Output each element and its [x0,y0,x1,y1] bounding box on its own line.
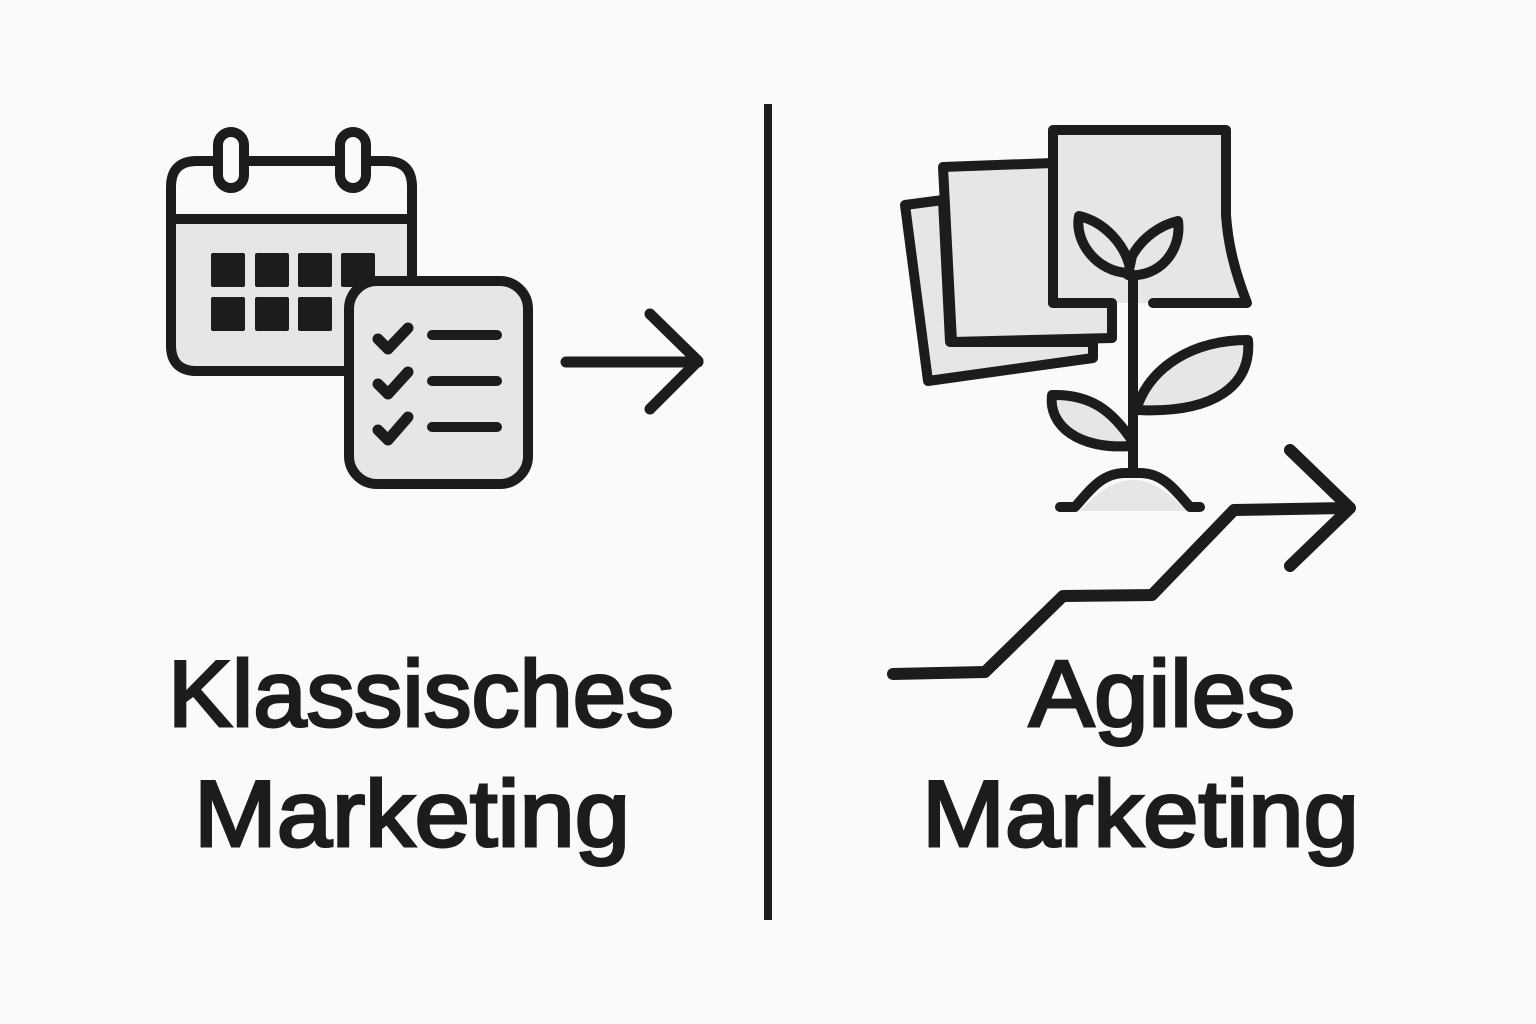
icon: checklist [349,281,528,484]
icon: calendar [171,132,412,371]
divider line [764,104,772,920]
icon: plant [1052,216,1248,511]
arrow: classic [566,314,698,409]
arrow: agile growth [893,450,1350,674]
heading: classic marketing: Klassisches [168,641,674,746]
heading: classic marketing [168,641,674,866]
heading: agile marketing: Marketing [922,761,1359,866]
heading: agile marketing [922,641,1359,866]
heading: classic marketing: Marketing [194,761,630,866]
heading: agile marketing: Agiles [1029,641,1295,746]
icon: sticky notes [905,130,1247,381]
